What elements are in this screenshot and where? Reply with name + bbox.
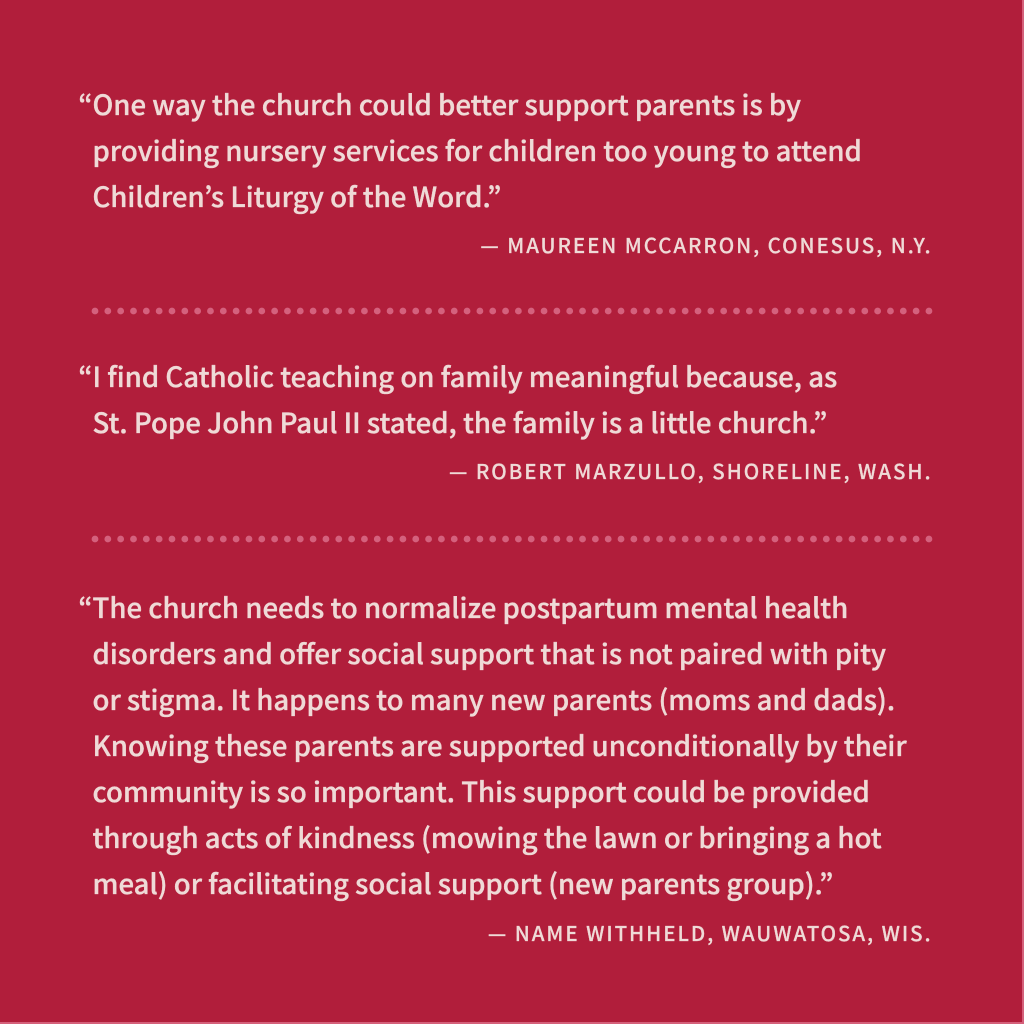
quote text: little church bbox=[78, 355, 837, 441]
quote text: postpartum support: The church needs to normalize postpartum mental health bbox=[92, 586, 848, 626]
quote text: nursery services bbox=[78, 83, 862, 215]
quote: name withheld bbox=[78, 586, 932, 947]
quote text: nursery services: Children’s Liturgy of the Word.” bbox=[92, 175, 501, 215]
quote text: little church: I find Catholic teaching on family meaningful because, as bbox=[92, 355, 837, 395]
quote text: postpartum support: meal) or facilitating social support (new parents group).” bbox=[92, 862, 833, 902]
quote: Maureen McCarron bbox=[78, 83, 932, 259]
quote text: postpartum support: Knowing these parents are supported unconditionally by their bbox=[92, 724, 907, 764]
dotted divider 1 bbox=[92, 308, 932, 314]
quote text: little church: “ bbox=[78, 355, 92, 395]
quote: Robert Marzullo bbox=[78, 355, 932, 485]
quote text: little church: St. Pope John Paul II stated, the family is a little church.” bbox=[92, 401, 827, 441]
attribution: Robert Marzullo: — ROBERT MARZULLO, SHORELINE, WASH. bbox=[449, 455, 932, 485]
dotted divider 2 bbox=[92, 536, 932, 542]
quote text: nursery services: providing nursery services for children too young to attend bbox=[92, 129, 862, 169]
quote text: nursery services: “ bbox=[78, 83, 92, 123]
quote text: postpartum support: or stigma. It happens to many new parents (moms and dads). bbox=[92, 678, 895, 718]
quote text: postpartum support: disorders and offer social support that is not paired with pity bbox=[92, 632, 886, 672]
attribution: Maureen McCarron: — MAUREEN MCCARRON, CONESUS, N.Y. bbox=[480, 229, 932, 259]
quote text: postpartum support bbox=[78, 586, 907, 902]
quote text: postpartum support: “ bbox=[78, 586, 92, 626]
quote text: postpartum support: through acts of kindness (mowing the lawn or bringing a hot bbox=[92, 816, 882, 856]
quote text: nursery services: One way the church could better support parents is by bbox=[92, 83, 801, 123]
attribution: name withheld: — NAME WITHHELD, WAUWATOSA, WIS. bbox=[488, 917, 932, 947]
quote text: postpartum support: community is so important. This support could be provided bbox=[92, 770, 870, 810]
